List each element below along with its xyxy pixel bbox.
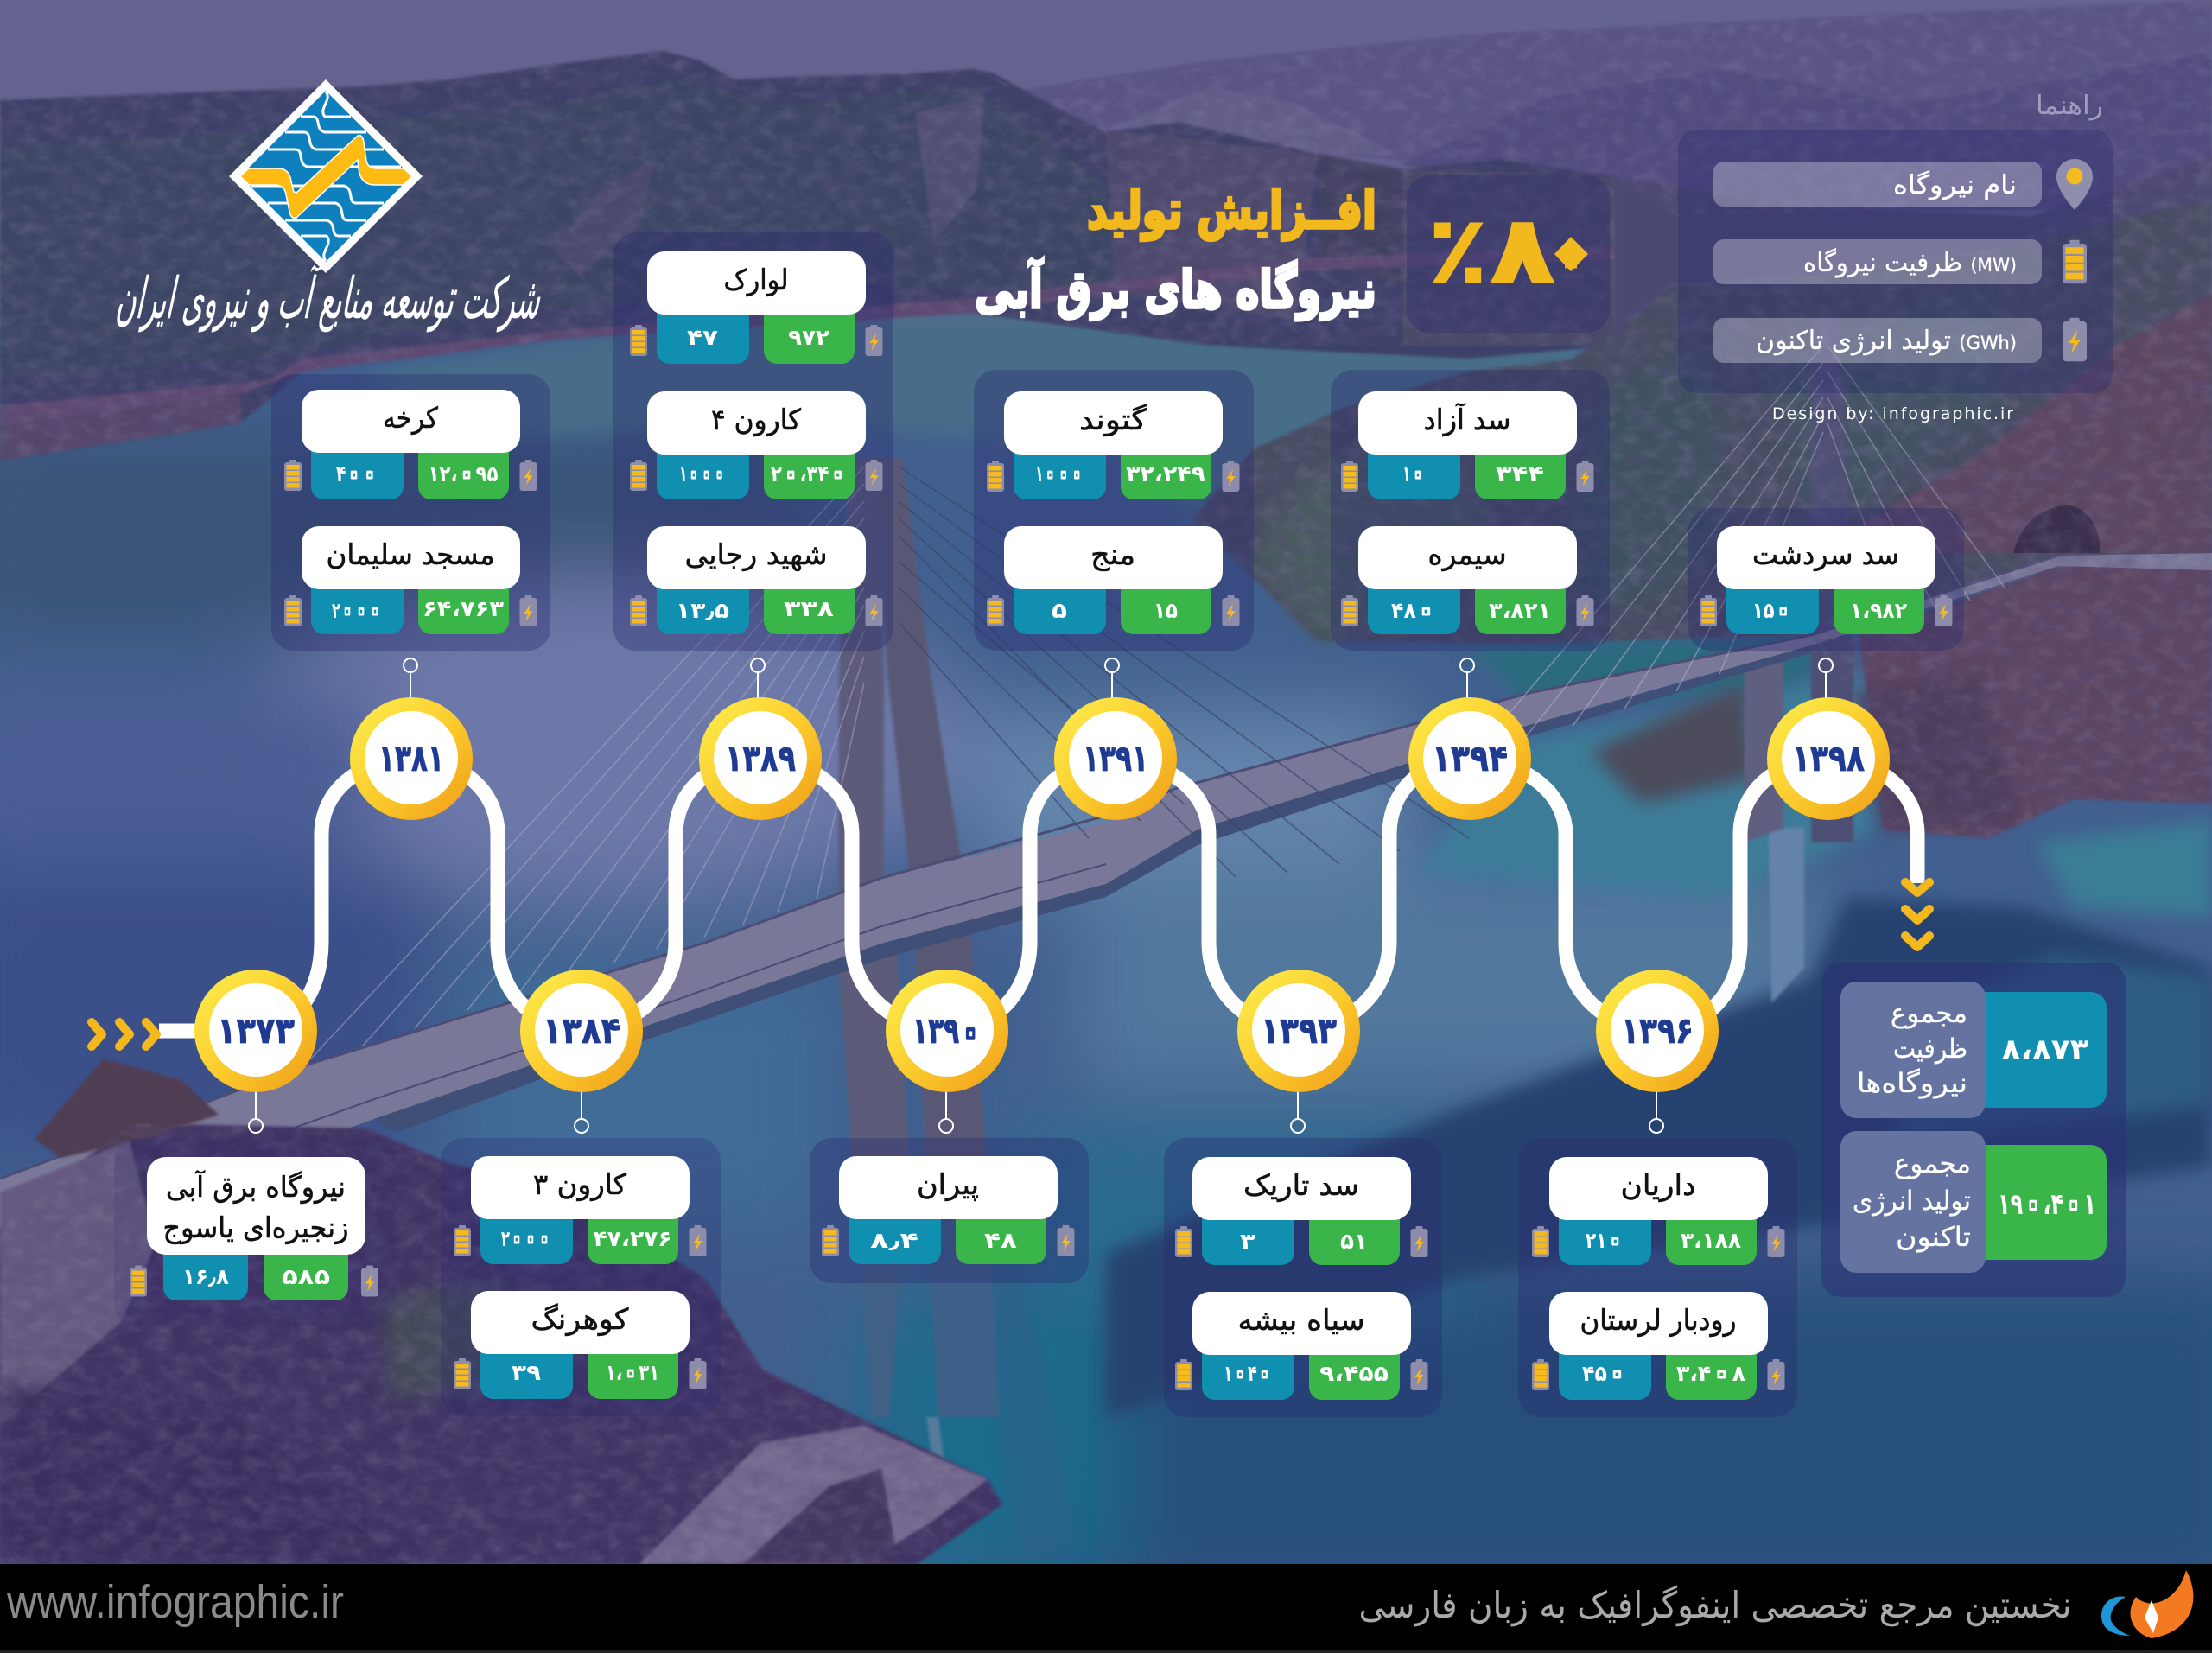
arrow: start chevrons: [92, 1022, 156, 1046]
year node 1373: [194, 970, 317, 1092]
title block: [975, 181, 1376, 321]
card: Rudbar Lorestan: [1532, 1292, 1785, 1400]
card: Sad Azad: ۳۴۴: [1496, 461, 1544, 486]
total energy: ۱۹۰،۴۰۱: [1998, 1175, 2096, 1230]
total energy: تاکنون: [1896, 1222, 1971, 1253]
card: Karun 3: [454, 1156, 707, 1264]
card: Sad Azad: [1341, 391, 1593, 499]
card: Gotvand: ۱۰۰۰: [1035, 454, 1084, 493]
card: Piran: ۴۸: [984, 1228, 1017, 1253]
card: Piran: پیران: [917, 1167, 979, 1201]
card: Sad Tarik: سد تاریک: [1243, 1168, 1359, 1202]
card: Sad Sardasht: ۱،۹۸۲: [1850, 598, 1907, 623]
main bridge tower: [838, 458, 1000, 1512]
icon: battery: [2063, 240, 2087, 283]
panel: year 1384 plants: [441, 1138, 721, 1416]
legend row: capacity: ظرفیت نیروگاه (MW): [1803, 248, 2017, 278]
card: Lavarak: ۹۷۲: [788, 325, 830, 350]
card: Darian: داریان: [1621, 1168, 1695, 1202]
credit line: Design by: infographic.ir: [1772, 404, 2016, 423]
card: Koohrang: ۱،۰۳۱: [606, 1352, 659, 1392]
card: Lavarak: ۴۷: [687, 325, 718, 350]
card: Sad Sardasht: [1700, 526, 1953, 634]
icon: energy bolt: [2063, 318, 2087, 361]
total energy: مجموع: [1894, 1148, 1971, 1179]
card: Darian: ۳،۱۸۸: [1681, 1228, 1741, 1253]
card: Yasuj chain hydropower plant: ۱۶٫۸: [182, 1264, 229, 1289]
arrow: end chevrons: [1905, 882, 1929, 947]
card: Sad Sardasht: ۱۵۰: [1752, 590, 1792, 630]
text: شرکت توسعه منابع آب و نیروی ایران: [111, 264, 550, 333]
card: Shahid Rajaee: شهید رجایی: [684, 537, 828, 571]
year node 1384: ۱۳۸۴: [543, 1009, 620, 1052]
total capacity: [1840, 982, 2107, 1118]
card: Sad Azad: ۱۰: [1402, 454, 1425, 493]
card: Yasuj chain hydropower plant: زنجیره‌ای یاسوج: [162, 1211, 349, 1245]
card: Koohrang: کوهرنگ: [531, 1302, 629, 1336]
total capacity: ۸،۸۷۳: [2001, 1033, 2089, 1067]
year node 1398: ۱۳۹۸: [1792, 737, 1865, 779]
card: Masjed Soleyman: مسجد سلیمان: [327, 537, 494, 571]
stat panel: 80 percent: [1407, 175, 1610, 333]
year node 1394: ۱۳۹۴: [1432, 737, 1508, 779]
icon: location pin: [2056, 159, 2093, 210]
year node 1389: [699, 697, 822, 820]
card: Manj: ۵: [1052, 598, 1067, 623]
card: Karun 3: ۲۰۰۰: [501, 1218, 551, 1258]
year node 1390: [886, 970, 1008, 1092]
card: Sad Tarik: ۵۱: [1340, 1229, 1368, 1254]
card: Yasuj chain hydropower plant: ۵۸۵: [282, 1264, 330, 1289]
footer url: www.infographic.ir: [6, 1576, 344, 1628]
left mountain range: [0, 51, 1614, 461]
year node 1389: ۱۳۸۹: [725, 737, 796, 779]
card: Gotvand: ۳۲،۲۴۹: [1126, 461, 1205, 486]
panel: totals: [1821, 963, 2126, 1297]
card: Rudbar Lorestan: رودبار لرستان: [1580, 1303, 1737, 1337]
right valley slope: [1192, 156, 2212, 838]
card: Karkheh: ۴۰۰: [336, 454, 378, 493]
card: Yasuj chain hydropower plant: [130, 1157, 378, 1300]
legend row: capacity: [1713, 239, 2042, 284]
legend heading: راهنما: [2036, 91, 2103, 121]
year node 1394: [1408, 697, 1531, 820]
card: Lavarak: لوارک: [724, 263, 788, 296]
year node 1381: ۱۳۸۱: [378, 737, 444, 779]
year node 1398: [1767, 697, 1890, 820]
legend row: energy: [1713, 318, 2042, 363]
year node 1396: [1596, 970, 1719, 1092]
card: Masjed Soleyman: ۲۰۰۰: [332, 590, 382, 630]
card: Karun 3: کارون ۳: [533, 1167, 626, 1201]
total energy: [1840, 1131, 2107, 1273]
stat panel: 80 percent: ٪: [1429, 198, 1486, 303]
card: Rudbar Lorestan: ۳،۴۰۸: [1676, 1353, 1745, 1393]
card: Lavarak: [630, 251, 883, 364]
card: Gotvand: [987, 391, 1239, 499]
card: Sad Tarik: ۳: [1240, 1229, 1255, 1254]
card: Sad Sardasht: سد سردشت: [1752, 537, 1899, 571]
card: Shahid Rajaee: ۱۳٫۵: [676, 598, 729, 623]
legend row: plant name: [1713, 162, 2042, 207]
card: Karun 4: [630, 391, 883, 499]
year node 1391: [1054, 697, 1177, 820]
icon: infographic.ir flame logo: [2101, 1570, 2193, 1638]
water tones: [0, 285, 2212, 1607]
distant hazy mountains: [1020, 0, 2212, 216]
card: Manj: ۱۵: [1154, 598, 1178, 623]
card: Karun 4: کارون ۴: [711, 403, 801, 436]
card: Karkheh: ۱۲،۰۹۵: [429, 454, 498, 493]
panel: year 1391 plants: [974, 370, 1254, 651]
bridge cables: [311, 346, 2005, 1059]
card: Darian: [1532, 1157, 1785, 1265]
bridge deck: [0, 553, 2212, 1262]
total energy: تولید انرژی: [1853, 1186, 1971, 1217]
card: Siah Bisheh: [1175, 1292, 1427, 1400]
footer tagline: نخستین مرجع تخصصی اینفوگرافیک به زبان فارسی: [1358, 1584, 2072, 1627]
total capacity: مجموع: [1891, 998, 1967, 1029]
panel: year 1394 plants: [1331, 370, 1610, 651]
card: Seimareh: ۴۸۰: [1391, 590, 1436, 630]
heading line 2: نیروگاه های برق آبی: [975, 257, 1376, 321]
connector stems: [249, 658, 1833, 1133]
total capacity: نیروگاه‌ها: [1857, 1068, 1967, 1099]
card: Karkheh: کرخه: [383, 401, 438, 435]
card: Rudbar Lorestan: ۴۵۰: [1582, 1353, 1627, 1393]
year node 1393: ۱۳۹۳: [1261, 1009, 1337, 1052]
timeline path: [159, 759, 1917, 1031]
card: Shahid Rajaee: [630, 526, 883, 634]
panel: year 1393 plants: [1164, 1138, 1442, 1417]
year node 1381: [350, 697, 473, 820]
card: Siah Bisheh: سیاه بیشه: [1237, 1303, 1365, 1337]
card: Karkheh: [284, 390, 537, 499]
panel: year 1389 plants: [613, 232, 893, 651]
right bridge piers: [1745, 317, 1853, 842]
year node 1390: ۱۳۹۰: [912, 1001, 982, 1061]
year node 1396: ۱۳۹۶: [1621, 1009, 1694, 1052]
panel: year 1373 plants: [114, 1138, 396, 1326]
card: Piran: [822, 1156, 1075, 1264]
total capacity: ظرفیت: [1893, 1033, 1967, 1065]
card: Koohrang: [454, 1291, 707, 1399]
year node 1373: ۱۳۷۳: [217, 1009, 295, 1052]
card: Piran: ۸٫۴: [870, 1228, 918, 1253]
stat panel: 80 percent: ۰: [1550, 218, 1592, 298]
card: Shahid Rajaee: ۳۳۸: [784, 596, 834, 621]
panel: year 1396 plants: [1518, 1138, 1797, 1417]
card: Siah Bisheh: ۹،۴۵۵: [1319, 1361, 1389, 1386]
legend row: energy: تولید انرژی تاکنون (GWh): [1756, 326, 2017, 356]
card: Sad Azad: سد آزاد: [1424, 403, 1510, 436]
card: Siah Bisheh: ۱۰۴۰: [1224, 1353, 1272, 1393]
card: Masjed Soleyman: [284, 526, 537, 634]
card: Sad Tarik: [1175, 1157, 1427, 1265]
bottom left rocky hill: [0, 1059, 1002, 1564]
year node 1393: [1237, 970, 1360, 1092]
card: Seimareh: ۳،۸۲۱: [1489, 598, 1551, 623]
panel: year 1398 plants: [1688, 508, 1964, 651]
card: Karun 4: ۱۰۰۰: [679, 454, 726, 493]
panel: year 1390 plants: [810, 1138, 1089, 1283]
panel: legend: [1678, 130, 2113, 393]
legend row: plant name: نام نیروگاه: [1893, 170, 2017, 200]
card: Seimareh: [1341, 526, 1593, 634]
card: Masjed Soleyman: ۶۴،۷۶۳: [423, 596, 504, 621]
card: Manj: [987, 526, 1239, 634]
card: Gotvand: گتوند: [1079, 403, 1147, 436]
card: Seimareh: سیمره: [1427, 537, 1507, 571]
card: Karun 4: ۲۰،۳۴۰: [771, 454, 847, 493]
card: Yasuj chain hydropower plant: نیروگاه برق آبی: [166, 1170, 346, 1204]
card: Darian: ۲۱۰: [1586, 1220, 1624, 1260]
card: Koohrang: ۳۹: [512, 1360, 541, 1385]
year node 1391: ۱۳۹۱: [1083, 737, 1148, 779]
panel: year 1381 plants: [271, 374, 550, 651]
card: Manj: منج: [1090, 537, 1135, 571]
heading line 1: افــزایش تولید: [1087, 181, 1376, 241]
stat panel: 80 percent: ۸: [1491, 198, 1554, 303]
logo: company diamond mark: [229, 79, 423, 273]
footer bar: [0, 1564, 2212, 1653]
year node 1384: [520, 970, 643, 1092]
card: Karun 3: ۴۷،۲۷۶: [593, 1226, 672, 1251]
